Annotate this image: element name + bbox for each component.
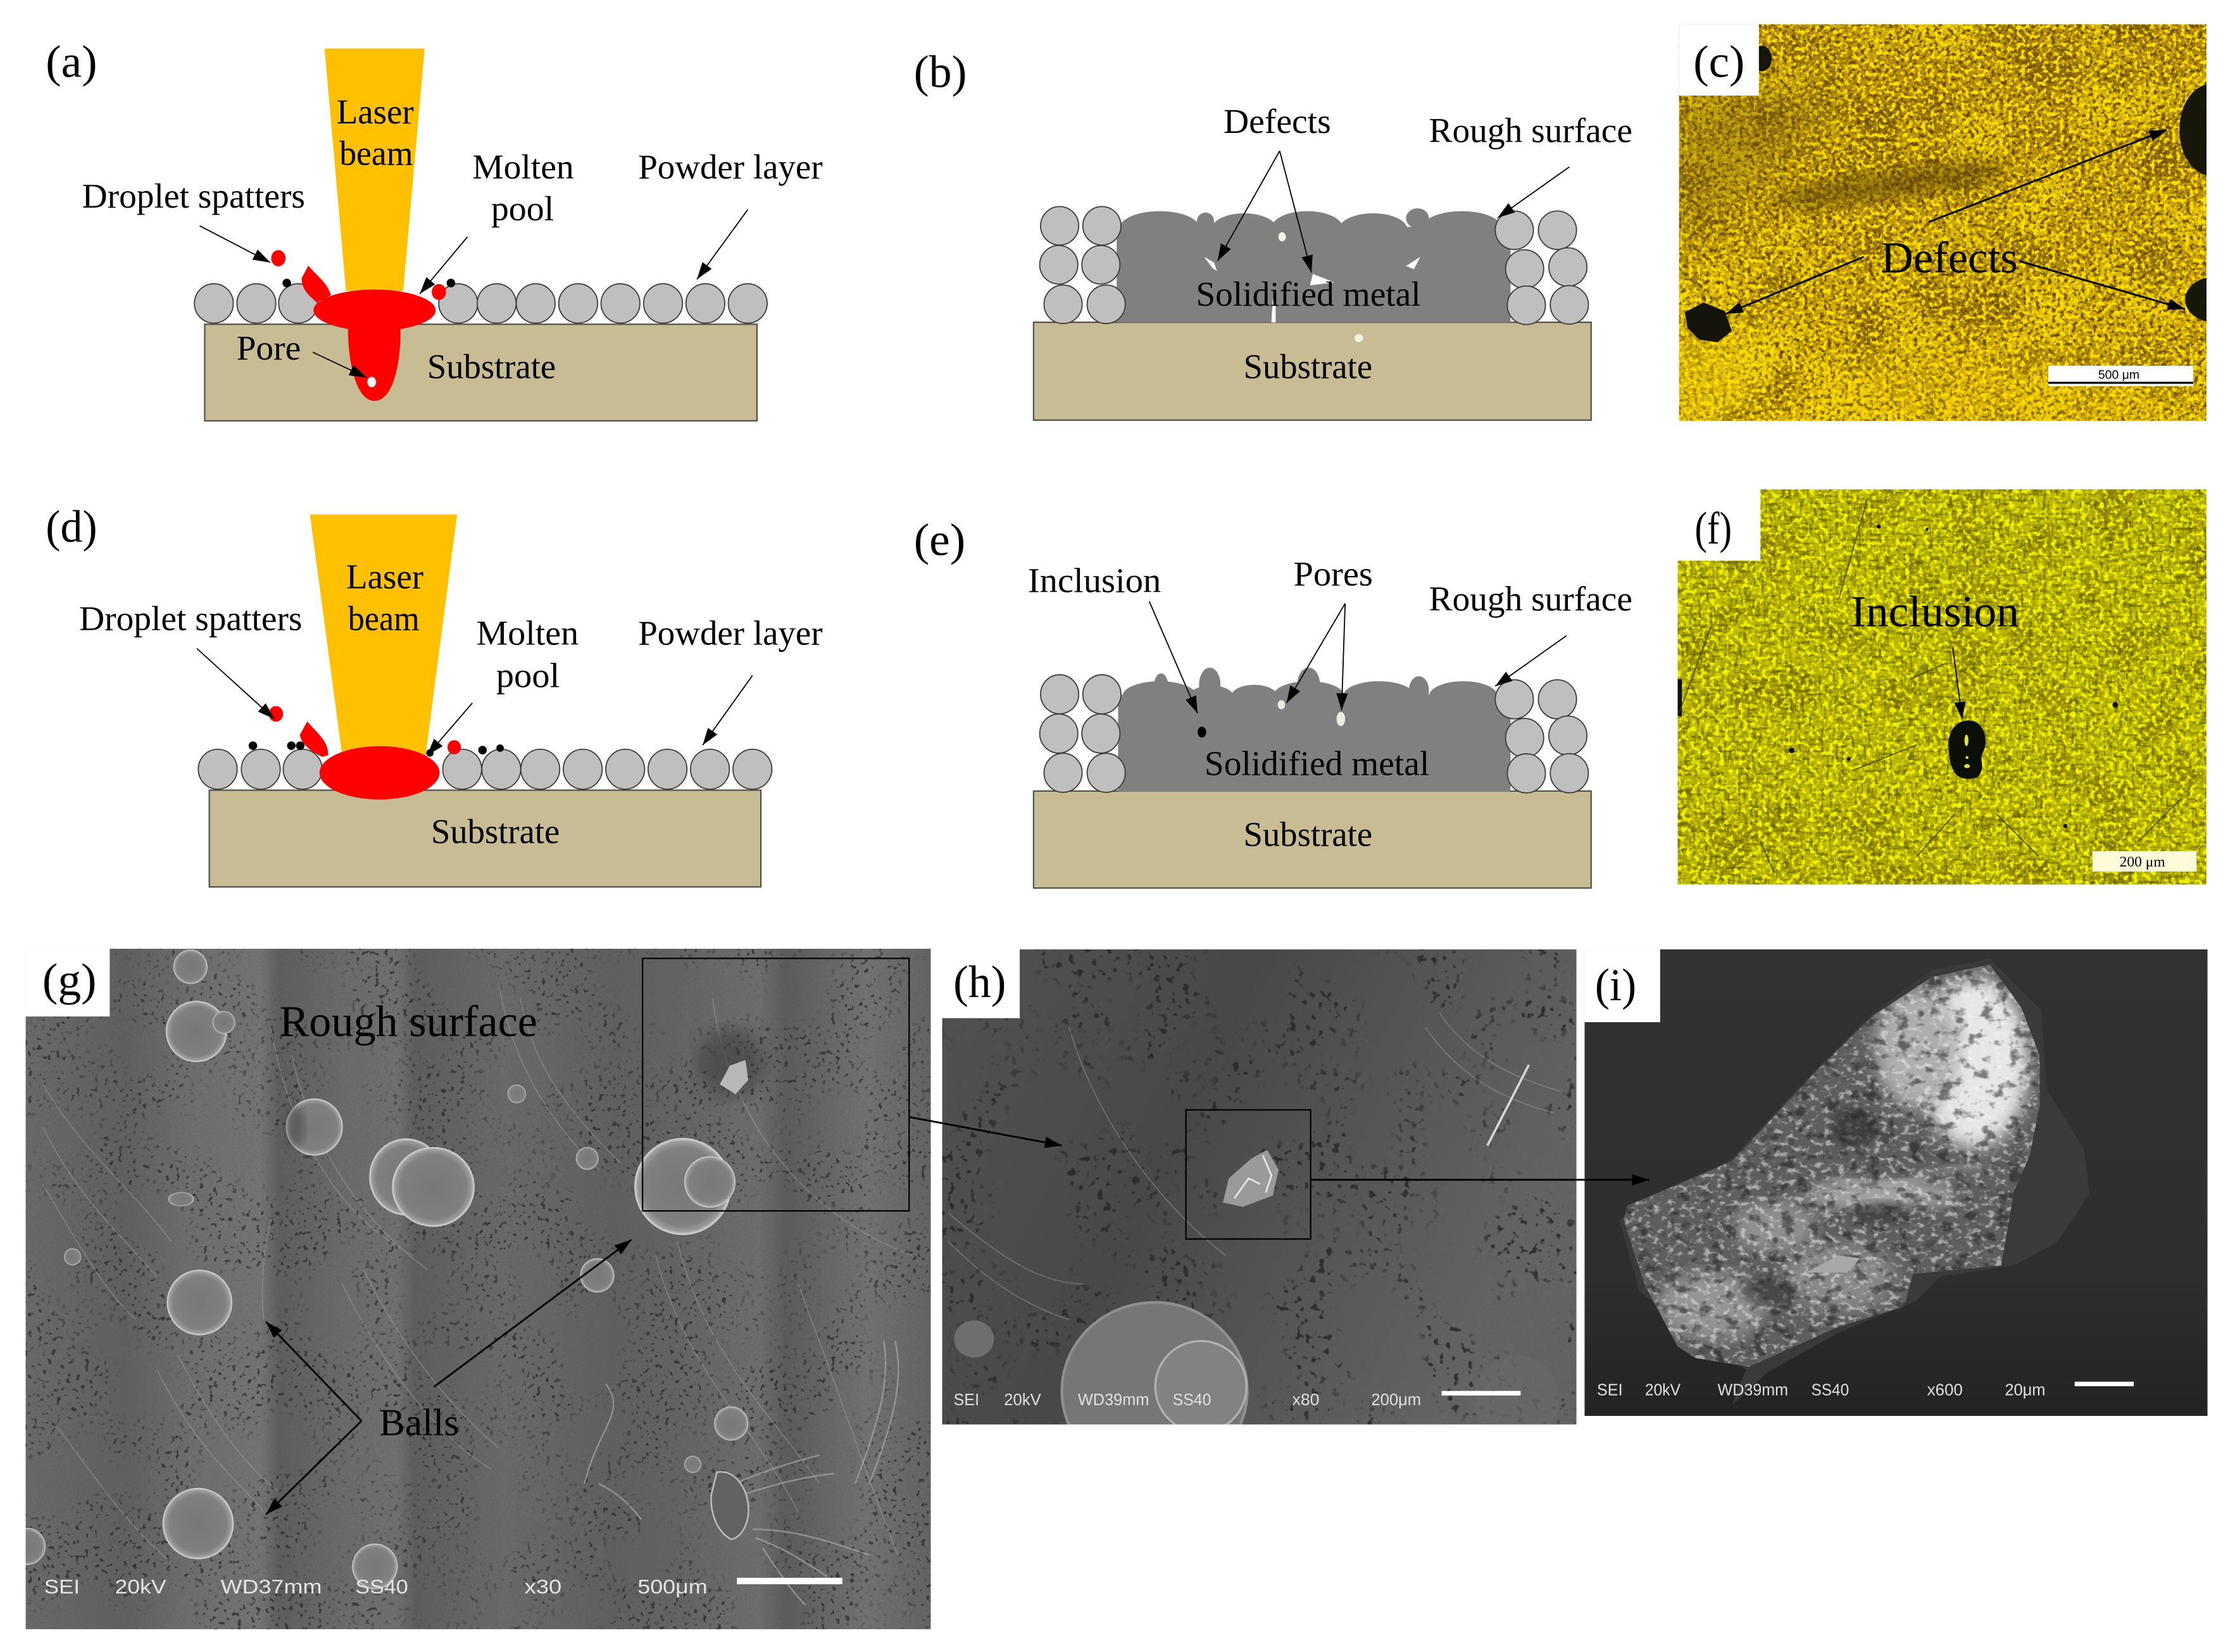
panel label (f): [1678, 488, 1760, 561]
arrow: h to i: [1311, 1179, 1649, 1180]
labels: beam: [339, 134, 413, 173]
panel label (f): (f): [1695, 503, 1732, 554]
arrow: g to h: [910, 1117, 1062, 1146]
arrows: [1149, 601, 1567, 713]
solidified metal: [1118, 668, 1511, 792]
SEM data bar: 20kV: [115, 1575, 166, 1598]
SEM data bar: x80: [1293, 1391, 1319, 1409]
labels: Solidified metal: [1205, 744, 1429, 783]
labels: Molten: [472, 147, 574, 186]
SEM data bar: WD39mm: [1718, 1381, 1788, 1399]
labels: [79, 558, 823, 851]
arrows: [1217, 151, 1569, 272]
panel label (b): (b): [914, 47, 967, 97]
labels: Solidified metal: [1196, 275, 1421, 313]
inclusion: [1198, 727, 1206, 737]
panel: (b) solidified metal with defects schematic: [914, 47, 1632, 420]
panel: (f) optical micrograph with inclusion: [1678, 488, 2207, 884]
SEM data bar: SEI: [44, 1575, 80, 1598]
labels: Substrate: [431, 812, 560, 851]
labels: [82, 92, 823, 385]
powder columns: [1040, 675, 1588, 793]
label: Rough surface: Rough surface: [279, 998, 537, 1046]
labels: pool: [496, 656, 560, 694]
SEM data bar: 500μm: [637, 1575, 708, 1598]
labels: [1028, 554, 1632, 854]
SEM data bar: 20kV: [1645, 1381, 1681, 1399]
substrate block: [204, 324, 757, 421]
arrows: [197, 649, 753, 755]
panel: (a) keyhole melting schematic: [46, 37, 823, 421]
micrograph texture: [1679, 24, 2207, 421]
metallic balls: [9, 949, 748, 1589]
labels: Substrate: [427, 347, 556, 385]
droplet spatters: [249, 706, 504, 756]
molten pool with keyhole: [302, 266, 435, 401]
magnified region box: [642, 958, 909, 1211]
panel label (i): (i): [1595, 960, 1636, 1010]
substrate block: [1034, 322, 1591, 420]
internal voids: [1204, 232, 1420, 342]
ball arrows: [266, 1240, 632, 1515]
solidified metal: [1117, 208, 1511, 322]
surface ripple lines: [43, 984, 912, 1605]
scale bar: [2048, 366, 2193, 386]
SEM data bar: 20kV: [1004, 1391, 1042, 1409]
scale bar: [2093, 851, 2196, 872]
panel label (h): (h): [953, 956, 1006, 1007]
SEM data bar: SS40: [1812, 1381, 1849, 1399]
arrows: [200, 210, 748, 377]
labels: Rough surface: [1429, 111, 1632, 150]
partial balls: [954, 1303, 1560, 1479]
panel label (h): [942, 949, 1020, 1018]
labels: Powder layer: [638, 147, 823, 186]
powder columns: [1040, 206, 1588, 325]
magnified region box: [1186, 1110, 1311, 1239]
panel: (g) SEM image of rough surface with balls: [9, 949, 930, 1629]
panel: (i) SEM image of inclusion particle: [1584, 949, 2208, 1416]
label: Defects: Defects: [1881, 234, 2018, 282]
label: Balls: Balls: [379, 1401, 459, 1444]
labels: Molten: [477, 614, 579, 653]
label: Inclusion: Inclusion: [1851, 587, 2019, 636]
SEM image: [9, 949, 930, 1629]
labels: Defects: [1224, 102, 1331, 141]
panel label (g): [26, 949, 110, 1017]
SEM data bar: 20μm: [2005, 1381, 2045, 1399]
labels: Droplet spatters: [82, 177, 305, 215]
labels: pool: [491, 189, 554, 228]
labels: Rough surface: [1429, 580, 1632, 618]
substrate block: [1034, 791, 1591, 888]
powder layer particles: [194, 284, 767, 323]
panel label (d): (d): [46, 501, 97, 552]
particle halo: [1619, 959, 2089, 1405]
labels: Substrate: [1243, 347, 1372, 385]
panel label (a): (a): [46, 37, 97, 87]
panel: (c) optical micrograph with defects: [1679, 24, 2207, 421]
panel label (i): [1584, 949, 1660, 1022]
SEM data bar: x600: [1927, 1381, 1963, 1399]
SEM data bar: SS40: [355, 1575, 408, 1598]
labels: Pores: [1293, 554, 1373, 593]
panel: (h) SEM image at higher magnification: [942, 949, 1577, 1424]
labels: [1196, 102, 1632, 385]
scale bar: 200 μm: [2120, 854, 2165, 870]
SEM data bar: [954, 1391, 1520, 1409]
SEM data bar: [1597, 1381, 2134, 1399]
SEM background: [1584, 949, 2208, 1416]
labels: Laser: [337, 92, 414, 131]
SEM data bar: SEI: [954, 1391, 979, 1409]
inclusion particle: [1611, 949, 2103, 1377]
SEM data bar: WD37mm: [221, 1575, 322, 1598]
SEM image: [942, 949, 1577, 1424]
powder layer particles: [198, 749, 772, 789]
SEM data bar: SEI: [1597, 1381, 1623, 1399]
SEM data bar: [44, 1575, 842, 1598]
labels: Droplet spatters: [79, 599, 302, 637]
panel label (e): (e): [914, 515, 965, 565]
molten pool: [300, 722, 440, 799]
micrograph texture: [1678, 489, 2207, 884]
labels: Laser: [346, 558, 423, 596]
SEM data bar: 200μm: [1371, 1391, 1421, 1409]
SEM data bar: x30: [525, 1575, 561, 1598]
inclusion arrow: [1953, 648, 1962, 719]
panel: (d) conduction melting schematic: [46, 501, 823, 887]
labels: beam: [348, 599, 420, 637]
pore: [367, 377, 376, 387]
labels: Powder layer: [638, 614, 823, 653]
substrate block: [210, 790, 761, 887]
laser beam: [310, 515, 457, 756]
laser beam: [325, 49, 425, 291]
panel: (e) solidified metal with inclusion and pores schematic: [914, 515, 1632, 888]
SEM data bar: SS40: [1173, 1391, 1211, 1409]
labels: Inclusion: [1028, 561, 1161, 599]
panel label (g): (g): [42, 954, 96, 1005]
SEM data bar: WD39mm: [1078, 1391, 1149, 1409]
droplet spatters: [271, 250, 455, 300]
panel label (c): (c): [1693, 37, 1744, 87]
defect arrows: [1726, 130, 2185, 314]
pores: [1278, 700, 1345, 726]
scale bar: 500 μm: [2098, 368, 2139, 382]
labels: Pore: [237, 329, 301, 367]
panel label (c): [1679, 24, 1759, 96]
labels: Substrate: [1243, 815, 1372, 854]
